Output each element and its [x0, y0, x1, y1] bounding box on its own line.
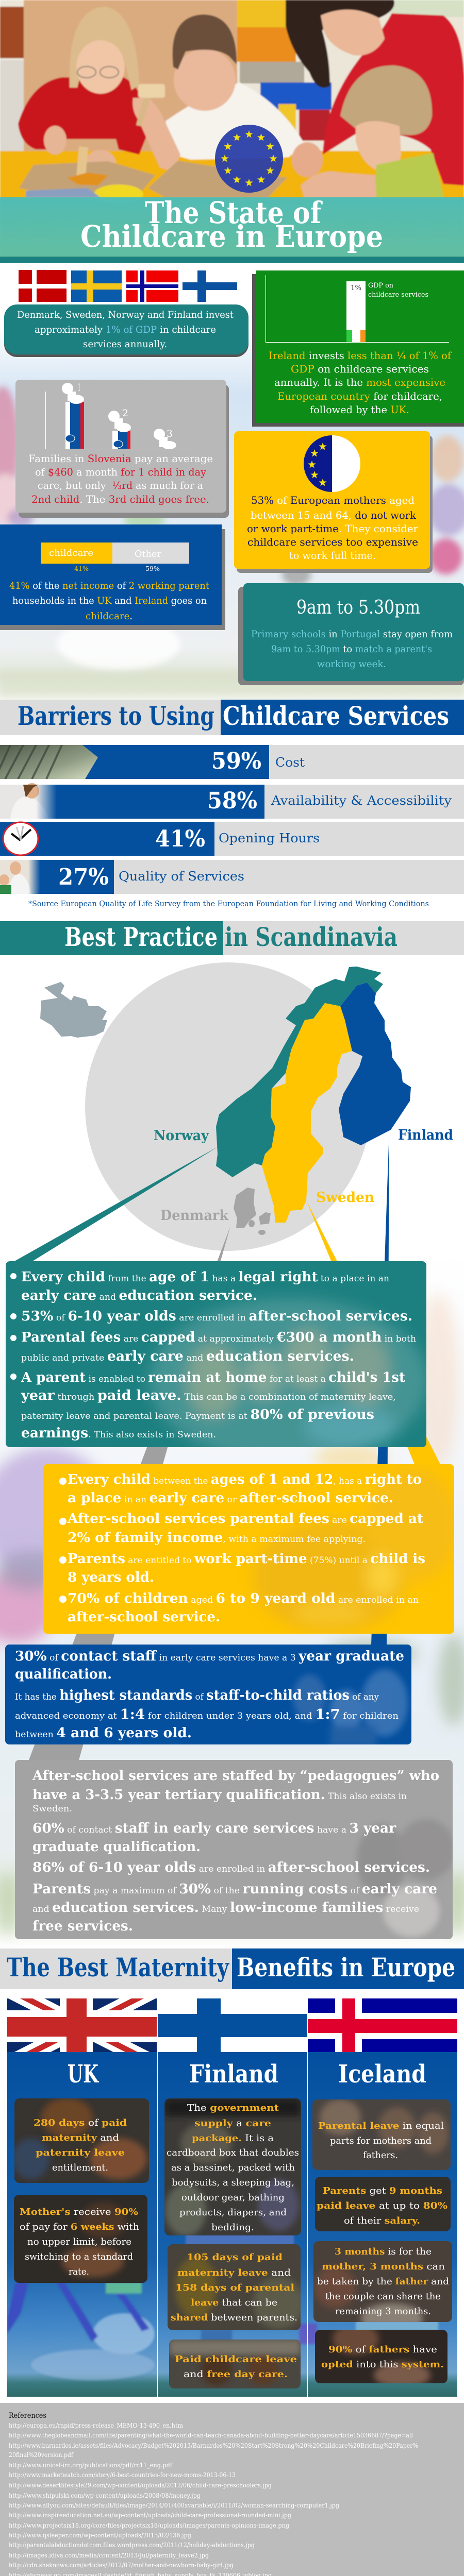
card: Finland care package: cardboard box that doubles [167, 2147, 299, 2158]
title band: Childcare in Europe [80, 219, 383, 254]
references panel: http://www.unicef-irc.org/publications/pdf/rc11_eng.pdf [9, 2462, 173, 2469]
panel: UK and Ireland net income: households in the UK and Ireland goes on [12, 595, 207, 606]
panel: Finland best practice: early care and education service. [21, 1288, 257, 1303]
card: Finland childcare leave [169, 2340, 301, 2388]
chart: Ireland 1% bar: 1% [351, 284, 361, 292]
bar: 58% availability: Availability & Accessibility [271, 793, 452, 808]
column headings: UK, Finland, Iceland: UK [68, 2060, 100, 2089]
panel: Sweden best practice: Every child between the ages of 1 and 12, has a right to [68, 1472, 422, 1487]
bar: 41% opening hours: 41% [155, 826, 205, 852]
connector: Finland [371, 1130, 389, 1645]
flag: Iceland [308, 1998, 457, 2052]
panel: Nordic GDP investment: Denmark, Sweden, Norway and Finland invest [17, 309, 234, 320]
chart: 41% vs 59% stacked bar: Other [135, 549, 161, 560]
card: Iceland three month split: remaining 3 months. [335, 2306, 431, 2317]
card: Finland care package: outdoor gear, bathing [181, 2192, 285, 2203]
panel: Portugal school hours: Primary schools in Portugal stay open from [251, 629, 453, 640]
references panel: http://www.qsleeper.com/wp-content/uploads/2013/02/136.jpg [9, 2532, 191, 2539]
card: Finland care package: The government [187, 2103, 279, 2113]
map region: Iceland [40, 982, 107, 1038]
panel: Sweden best practice: 8 years old. [68, 1570, 154, 1585]
references panel: http://www.theglobeandmail.com/life/parenting/what-the-world-can-teach-canada-about-building-better-daycare/article15036687/?page=all [9, 2432, 413, 2439]
map region: Norway [216, 967, 383, 1177]
card: Iceland three month split [313, 2241, 452, 2322]
panel: Ireland GDP with bar chart: followed by the UK. [310, 403, 409, 416]
icon: clock [3, 822, 38, 855]
panel: maternity columns background [7, 2052, 457, 2397]
panel: Denmark best practice: free services. [32, 1919, 133, 1934]
references panel: http://www.shipulski.com/wp-content/uploads/2008/08/money.jpg [9, 2492, 201, 2499]
bar: 59% cost [0, 745, 464, 779]
heading: Best Practice in Scandinavia [0, 921, 464, 955]
card: Iceland equal leave: parts for mothers and [330, 2136, 432, 2146]
map: Nordic countries with connectors: Norway [154, 1128, 209, 1144]
column headings: UK, Finland, Iceland: Finland [189, 2060, 278, 2089]
hero photo: teacher with children at table [0, 0, 464, 259]
chart: cost per child bars: 1 [77, 382, 81, 393]
card: UK mothers' pay: of pay for 6 weeks with [20, 2222, 139, 2232]
card: Iceland nine months: of their salary. [344, 2215, 420, 2226]
card: UK maternity entitlement: paternity leave [36, 2147, 125, 2158]
title band [0, 195, 464, 263]
panel: Denmark best practice: have a 3-3.5 year tertiary qualification. This also exists in [32, 1787, 407, 1803]
card: Finland care package: bedding. [211, 2222, 254, 2233]
references panel: 20final%20version.pdf [9, 2451, 74, 2459]
bar: 58% availability [0, 783, 464, 819]
map: Nordic countries with connectors: Finland [398, 1127, 453, 1143]
panel: Norway best practice [5, 1645, 411, 1747]
panel: Denmark best practice: graduate qualification. [32, 1839, 201, 1855]
card: Iceland equal leave [312, 2099, 451, 2170]
references panel: http://parentalabductiondotcom.files.wordpress.com/2011/12/holiday-abductions.jpg [9, 2541, 255, 2549]
references panel [0, 2403, 464, 2576]
panel: UK and Ireland net income: 41% of the net income of 2 working parent [9, 580, 209, 591]
card: UK mothers' pay [14, 2195, 147, 2283]
bar: 41% opening hours: Opening Hours [219, 831, 320, 845]
heading: Barriers to Using Childcare Services [0, 700, 464, 735]
panel: European mothers part-time: to work full time. [289, 549, 376, 562]
card: Finland paid leave [168, 2244, 304, 2330]
references panel: http://www.projectsix18.org/core/files/projectsix18/uploads/images/parents-opinions-image.png [9, 2522, 289, 2529]
icon: half EU, half white circle [304, 435, 360, 492]
chart: Ireland 1% bar: childcare services [368, 291, 428, 299]
card: UK maternity entitlement: 280 days of paid [34, 2117, 127, 2128]
panel: Finland best practice: earnings. This also exists in Sweden. [21, 1426, 216, 1441]
map: Nordic countries with connectors [14, 962, 453, 1760]
panel: Slovenia cost per child: care, but only ⅓rd as much for a [38, 479, 203, 492]
map: Nordic countries with connectors: Sweden [316, 1190, 374, 1206]
panel: Denmark best practice: Parents pay a maximum of 30% of the running costs of early care [32, 1882, 437, 1897]
panel: Finland best practice: public and private early care and education services. [21, 1349, 354, 1364]
panel: European mothers part-time: childcare services too expensive [247, 536, 418, 548]
card: Finland care package: as a bassinet, packed with [171, 2162, 295, 2173]
panel: Sweden best practice: 2% of family income , with a maximum fee applying. [68, 1530, 366, 1546]
panel: Denmark best practice: Sweden. [32, 1804, 72, 1814]
panel: Denmark best practice: and education services. Many low-income families receive [32, 1900, 419, 1916]
map region: Denmark [234, 1188, 271, 1235]
chart: Ireland 1% bar [266, 275, 449, 343]
card: Iceland three month split: mother, 3 months can [322, 2261, 445, 2272]
panel: Finland best practice: year through paid leave. This can be a combination of maternity leave, [21, 1388, 396, 1403]
panel: Slovenia cost per child: of $460 a month for 1 child in day [35, 466, 207, 478]
card: Iceland fathers opted in: opted into this system. [321, 2359, 444, 2370]
icon: woman photo [0, 783, 57, 819]
panel: Denmark best practice [15, 1760, 455, 1939]
panel: Ireland GDP with bar chart: GDP on childcare services [291, 363, 429, 375]
panel: Portugal school hours: working week. [317, 658, 386, 670]
bar: 27% quality of services: Quality of Services [119, 869, 244, 884]
map: Nordic countries with connectors: Denmark [160, 1208, 229, 1224]
references panel: http://cdn.sheknows.com/articles/2012/07/mother-and-newborn-baby-girl.jpg [9, 2562, 234, 2569]
panel: Slovenia cost per child: 2nd child. The 3rd child goes free. [31, 493, 209, 505]
bar: 58% availability: 58% [207, 788, 257, 814]
heading: Best Practice in Scandinavia: in Scandinavia [225, 922, 397, 952]
panel: European mothers part-time: or work part-time. They consider [247, 522, 418, 535]
card: Iceland three month split: the couple can share the [325, 2291, 441, 2302]
map region: Finland [339, 982, 411, 1145]
title band: The State of [145, 195, 323, 230]
panel: Sweden best practice: Parents are entitled to work part-time (75%) until a child is [68, 1551, 425, 1567]
panel: Ireland GDP with bar chart: annually. It is the most expensive [274, 376, 445, 388]
column headings: UK, Finland, Iceland [68, 2060, 426, 2089]
panel: Denmark best practice: After-school services are staffed by “pedagogues” who [32, 1768, 439, 1784]
references panel: References [9, 2412, 46, 2420]
references panel: http://europa.eu/rapid/press-release_MEMO-13-490_en.htm [9, 2422, 184, 2429]
panel: Nordic GDP investment: services annually. [83, 338, 167, 350]
card: UK mothers' pay: no upper limit, before [27, 2236, 131, 2247]
card: Iceland fathers opted in [315, 2324, 448, 2388]
panel: Ireland GDP with bar chart [252, 270, 464, 427]
panel: Ireland GDP with bar chart: European country for childcare, [277, 390, 442, 402]
heading: Best Practice in Scandinavia: Best Practice [64, 922, 218, 952]
panel: Norway best practice: It has the highest standards of staff-to-child ratios of any [15, 1688, 379, 1703]
panel: Slovenia cost per child [15, 380, 229, 518]
card: Finland care package: products, diapers, and [179, 2207, 287, 2218]
chart: cost per child bars: 3 [167, 428, 173, 439]
bar: 41% opening hours [0, 822, 464, 856]
panel: Denmark best practice: 60% of contact staff in early care services have a 3 year [32, 1821, 396, 1836]
connector: Norway [14, 1146, 219, 1261]
flag: Finland [158, 1998, 307, 2052]
card: Iceland nine months: Parents get 9 months [323, 2185, 442, 2196]
flag: UK [7, 1998, 157, 2052]
card: Finland care package [164, 2098, 301, 2236]
bar: 27% quality of services [0, 860, 464, 894]
panel: Sweden best practice: after-school service. [68, 1609, 220, 1625]
card: Finland childcare leave: Paid childcare leave [175, 2354, 297, 2365]
references panel: http://www.inspireeducation.net.au/wp-content/uploads/child-care-professional-rounded-mini.jpg [9, 2512, 291, 2519]
heading: The Best Maternity Benefits in Europe: The Best Maternity [7, 1952, 230, 1982]
references panel: http://www.desertlifestyle29.com/wp-content/uploads/2012/06/child-care-preschoolers.jpg [9, 2482, 272, 2489]
card: Iceland equal leave: fathers. [363, 2150, 398, 2161]
panel: Portugal school hours [238, 583, 464, 685]
connector: Sweden [306, 1200, 440, 1464]
card: UK maternity entitlement: maternity and [42, 2132, 119, 2143]
panel: Nordic GDP investment [4, 304, 248, 357]
background: sky and children [0, 263, 464, 700]
references panel: http://images.idiva.com/media/content/2013/Jul/paternity_leave2.jpg [9, 2552, 209, 2559]
panel: Finland best practice: Every child from the age of 1 has a legal right to a place in an [21, 1269, 389, 1285]
map region: Sweden [262, 1003, 352, 1223]
card: Iceland nine months: paid leave at up to 80% [317, 2200, 448, 2211]
card: Finland childcare leave: and free day care. [184, 2369, 288, 2380]
references panel: http://www.allyou.com/sites/default/files/image/2014/01/400xvariable/i/2011/02/woman-searching-computer1.jpg [9, 2502, 339, 2509]
chart: 41% vs 59% stacked bar [41, 543, 189, 572]
flags: Denmark, Sweden, Norway, Finland [19, 270, 237, 302]
card: Iceland nine months [315, 2177, 451, 2231]
panel: Finland best practice [6, 1261, 428, 1463]
card: UK mothers' pay: Mother's receive 90% [20, 2207, 138, 2217]
panel: Finland best practice: 53% of 6-10 year olds are enrolled in after-school services. [21, 1309, 412, 1324]
card: Finland paid leave: maternity leave and [177, 2267, 291, 2278]
card: Finland paid leave: leave that can be [191, 2297, 277, 2308]
bar: 59% cost: 59% [211, 748, 261, 774]
panel: Finland best practice: Parental fees are capped at approximately €300 a month in both [21, 1330, 416, 1345]
panel: Sweden best practice: 70% of children aged 6 to 9 yeard old are enrolled in an [68, 1591, 419, 1606]
background: children behind Scandinavia panels [0, 1252, 464, 1948]
panel: Portugal school hours: 9am to 5.30pm to match a parent's [271, 643, 432, 655]
card: Finland paid leave: shared between parents. [171, 2312, 297, 2323]
chart: 41% vs 59% stacked bar: childcare [49, 548, 93, 558]
panel: Nordic GDP investment: approximately 1% of GDP in childcare [35, 324, 216, 335]
source note: *Source European Quality of Life Survey from the European Foundation for Living and Working Conditions [28, 899, 429, 908]
chart: Ireland 1% bar: GDP on [368, 282, 394, 290]
chart: cost per child bars [45, 382, 197, 449]
card: UK maternity entitlement [12, 2098, 149, 2183]
panel: Norway best practice: advanced economy at 1:4 for children under 3 years old, and 1:7 for children [15, 1707, 399, 1722]
icon: banknotes [0, 745, 98, 779]
chart: 41% vs 59% stacked bar: 41% [74, 565, 89, 572]
panel: European mothers part-time: between 15 and 64, do not work [251, 509, 417, 521]
panel: European mothers part-time: 53% of European mothers aged [251, 494, 415, 506]
card: Iceland fathers opted in: 90% of fathers have [328, 2344, 437, 2355]
panel: UK and Ireland net income [0, 524, 225, 630]
panel: UK and Ireland net income: childcare. [86, 611, 132, 622]
chart: cost per child bars: 2 [122, 408, 128, 419]
panel: Portugal school hours: 9am to 5.30pm [296, 597, 420, 618]
card: Finland paid leave: 158 days of parental [175, 2282, 294, 2293]
panel: Sweden best practice: a place in an early care or after-school service. [68, 1490, 393, 1506]
card: Finland paid leave: 105 days of paid [187, 2252, 283, 2263]
panel: Norway best practice: between 4 and 6 years old. [15, 1725, 192, 1741]
heading: The Best Maternity Benefits in Europe [0, 1948, 464, 1989]
panel: Finland best practice: A parent is enabled to remain at home for at least a child's 1st [21, 1370, 405, 1385]
card: UK maternity entitlement: entitlement. [52, 2162, 108, 2173]
bar: 27% quality of services: 27% [58, 864, 109, 890]
references panel: http://www.barnardos.ie/assets/files/Advocacy/Budget%202013/Barnardos%20%20Start%20Strong%20%20Childcare%20Briefing%20Paper% [9, 2442, 418, 2449]
card: Finland care package: supply a care [194, 2118, 271, 2129]
bullets [10, 1273, 16, 1380]
card: UK mothers' pay: switching to a standard [25, 2251, 133, 2262]
panel: Sweden best practice: After-school services parental fees are capped at [67, 1511, 423, 1527]
chart: 41% vs 59% stacked bar: 59% [145, 565, 160, 572]
heading: Barriers to Using Childcare Services: Barriers to Using [18, 701, 214, 731]
panel: Denmark best practice: 86% of 6-10 year olds are enrolled in after-school services. [32, 1860, 430, 1875]
panel: Norway best practice: qualification. [15, 1667, 112, 1682]
panel: Sweden best practice [43, 1464, 459, 1634]
connector: Denmark [29, 1226, 230, 1760]
card: Iceland three month split: be taken by the father and [317, 2276, 449, 2287]
card: UK mothers' pay: rate. [69, 2266, 89, 2277]
panel: Norway best practice: 30% of contact staff in early care services have a 3 year graduate [15, 1649, 404, 1664]
card: Iceland three month split: 3 months is for the [335, 2246, 432, 2257]
EU stars circle [215, 125, 283, 193]
panel: Ireland GDP with bar chart: Ireland invests less than ¼ of 1% of [269, 349, 452, 362]
panel: Finland best practice: paternity leave and parental leave. Payment is at 80% of previous [21, 1407, 374, 1422]
bar: 59% cost: Cost [275, 755, 305, 770]
references panel: http://www.marketwatch.com/story/6-best-countries-for-new-moms-2013-06-13 [9, 2471, 236, 2479]
column headings: UK, Finland, Iceland: Iceland [338, 2060, 426, 2089]
panel: Slovenia cost per child: Families in Slovenia pay an average [28, 452, 213, 465]
card: Finland care package: bodysuits, a sleeping bag, [172, 2177, 294, 2188]
card: Finland care package: package. It is a [192, 2133, 274, 2144]
card: Iceland equal leave: Parental leave in equal [318, 2121, 444, 2131]
panel: European mothers part-time [234, 431, 433, 573]
bullets [59, 1478, 67, 1603]
icon: carer and child photo [0, 860, 40, 894]
